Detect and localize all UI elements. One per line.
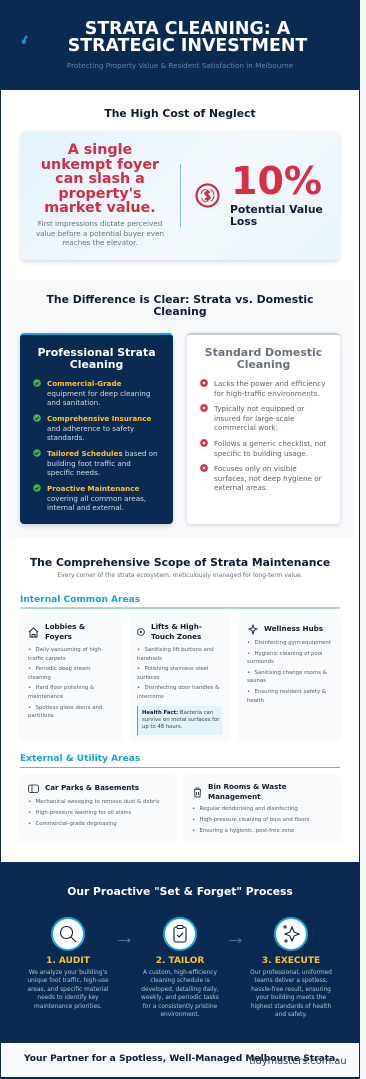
icon: sparkles [274,917,308,951]
step text: We analyze your building's [29,970,107,976]
icon: dollar circle [195,183,220,208]
step 3 execute [250,917,332,1018]
card title [205,346,322,371]
check item 3: Tailored Schedules based on [47,449,158,458]
icon: lift button [137,628,145,636]
arrow [229,938,242,943]
check item 3: specific needs. [47,468,100,477]
stat: 10%: 10% [231,159,322,203]
panel: comparison background [7,280,353,537]
card heading: Car Parks & Basements [45,783,139,792]
task list: • [137,685,140,691]
card title: Professional Strata [37,346,156,359]
divider [180,164,181,227]
card title: Cleaning [70,358,123,371]
step title: 1. AUDIT [46,956,90,966]
card title: Standard Domestic [205,346,322,359]
cross item 4 [200,464,322,492]
task list: • [28,685,31,691]
check item 4: covering all common areas, [47,494,146,503]
task list: health [247,698,264,704]
section rule [20,607,340,608]
heading: process: Our Proactive "Set & Forget" Process [67,884,293,898]
card title: Cleaning [237,358,290,371]
step text: developed, detailing daily, [141,987,219,993]
icon: bin [194,788,201,798]
heading: difference: The Difference is Clear: Strata vs. Domestic [46,293,314,306]
check item 4 [33,484,146,512]
step 2 tailor [141,917,219,1018]
task list: • [137,647,140,653]
check item 2: standards. [47,433,85,442]
icon: sparkle [248,624,258,635]
supporting text: First impressions dictate perceived [38,219,162,228]
task list: Mechanical sweeping to remove dust & debris High-pressure washing for oil stains Commercial-grade degreasing [36,799,160,827]
cross item 1: for high-traffic environments. [214,389,320,398]
task list: • [247,670,250,676]
icon: clipboard [163,917,197,951]
task list: Disinfecting gym equipment Hygienic cleaning of pool [254,640,331,657]
icon: house [28,627,38,638]
watermark: tidymasters.com.au [249,1056,347,1067]
cross item 2: commercial work. [214,423,278,432]
card heading: Lobbies & [45,622,85,631]
task list: • [28,810,31,816]
check item 4: Proactive Maintenance [47,484,139,493]
step text: environment. [160,1012,200,1018]
health fact callout: survive on metal surfaces for [142,717,219,723]
task list: maintenance Spotless glass doors and [28,694,102,711]
section rule [20,767,340,768]
stat label [230,203,323,228]
scope subtitle: Every corner of the strata ecosystem, meticulously managed for long-term value. [57,572,303,579]
task list: • [28,799,31,805]
card: bin rooms and waste management [184,775,340,842]
check item 2: Comprehensive Insurance [47,414,151,423]
cross item 3: Follows a generic checklist, not [214,439,326,448]
card: lifts and high-touch zones [130,615,230,742]
icon: car park [28,784,39,793]
heading: scope: The Comprehensive Scope of Strata Maintenance [30,556,330,568]
step 1 audit [27,917,109,1010]
health fact callout [137,706,222,735]
panel: cost of neglect [21,131,339,260]
supporting text [36,219,164,247]
cross item 4: Focuses only on visible [214,464,297,473]
step text: maintenance priorities. [34,1004,102,1010]
health fact callout: up to 48 hours. [142,724,182,730]
heading: internal common areas: Internal Common Areas [20,594,140,604]
task list: • [28,666,31,672]
card heading: Wellness Hubs [264,624,323,633]
card heading: Foyers [45,632,72,641]
heading: high cost of neglect: The High Cost of Neglect [104,107,256,120]
check item 3: building foot traffic and [47,459,131,468]
task list: • [192,817,195,823]
check item 3 [33,449,158,477]
subtitle: Protecting Property Value & Resident Satisfaction in Melbourne [67,60,293,70]
step text: for a consistently pristine [143,1004,217,1010]
callout text: market value. [44,200,156,216]
task list: cleaning Hard floor polishing & [28,675,94,691]
supporting text: value before a potential buyer even [36,229,164,238]
panel: content background [1,90,359,862]
task list: • [192,806,195,812]
task list: intercoms [137,694,164,700]
card heading: Management [208,792,261,801]
task list: • [247,640,250,646]
cross item 2: insured for large-scale [214,414,294,423]
cross item 1 [200,379,326,398]
cross item 1: Lacks the power and efficiency [214,379,325,388]
task list: surfaces Disinfecting door handles & [137,675,219,691]
task list [137,647,219,700]
cross item 2 [200,404,304,432]
step text: needs to identify key [37,995,99,1001]
cross item 3 [200,439,326,458]
footer message: Your Partner for a Spotless, Well-Managed Melbourne Strata. [24,1054,339,1064]
card heading: Lifts & High- [151,622,202,631]
check item 2 [33,414,151,442]
heading: difference [46,293,314,318]
panel: professional strata cleaning [20,333,173,524]
task list [247,640,331,704]
step text: Our professional, uniformed [250,970,332,976]
panel: standard domestic cleaning [187,333,340,524]
task list: • [192,828,195,834]
step text: cleaning schedule is [150,978,210,984]
title: STRATA CLEANING: A [85,18,290,38]
step text: areas, and specific material [28,987,108,993]
step text [27,969,109,1010]
task list: • [28,647,31,653]
callout text: unkempt foyer [41,156,159,172]
task list: surrounds Sanitising change rooms & [247,659,327,676]
step text: weekly, and periodic tasks [141,995,219,1001]
check item 4: internal and external. [47,503,124,512]
step text: A custom, high-efficiency [143,970,217,976]
icon: water drop [22,35,28,44]
card heading [208,782,287,801]
arrow [118,938,130,943]
task list: • [247,651,250,657]
callout text: A single [68,142,132,158]
task list: • [137,666,140,672]
check item 1: Commercial-Grade [47,379,121,388]
task list: Regular deodorising and disinfecting High-pressure cleaning of bins and floors Ensuring a hygienic, pest-free zone [200,806,309,834]
card heading [45,622,85,641]
heading: difference: Cleaning [153,305,207,318]
stat label: Potential Value [230,203,323,216]
title [68,18,308,56]
cross item 4: external areas. [214,483,268,492]
cross item 4: surfaces, not deep hygiene or [214,474,322,483]
callout text [41,142,159,216]
task list: • [28,821,31,827]
step text: unique foot traffic, high-use [27,978,109,984]
card heading: Bin Rooms & Waste [208,782,287,791]
check item 2: and adherence to safety [47,424,134,433]
step text: hassle-free result, ensuring [251,987,331,993]
task list: saunas Ensuring resident safety & [247,678,326,695]
task list: partitions [28,713,54,719]
check item 1: equipment for deep cleaning [47,389,150,398]
step text [250,969,332,1019]
task list: Sanitising lift buttons and [144,647,214,653]
card: wellness hubs [239,615,340,742]
card: lobbies and foyers [20,615,121,742]
check item 1: and sanitation. [47,398,100,407]
supporting text: reaches the elevator. [62,238,138,247]
step text: teams deliver a spotless, [254,978,328,984]
callout text: can slash a [55,171,145,187]
health fact callout: Health Fact: Bacteria can [142,710,213,716]
cross item 3: specific to building usage. [214,449,308,458]
icon: magnifier [51,917,85,951]
check item 1 [33,379,150,407]
heading: external and utility areas: External & Utility Areas [20,754,140,764]
cross item 2: Typically not equipped or [214,404,304,413]
card title [37,346,156,371]
header band [0,0,360,90]
panel: footer [1,1043,359,1077]
step title: 2. TAILOR [156,956,204,966]
task list: • [28,705,31,711]
title: STRATEGIC INVESTMENT [68,36,307,56]
task list: Daily vacuuming of high- [36,647,103,653]
task list: traffic carpets Periodic deep steam [28,656,90,672]
step text: and safety. [275,1012,307,1018]
task list: handrails Polishing stainless steel [137,656,208,672]
callout text: property's [58,186,142,202]
card heading: Touch Zones [151,632,201,641]
step text: highest standards of health [251,1004,331,1010]
card: car parks and basements [20,775,176,842]
step text [141,969,219,1018]
task list: • [247,689,250,695]
card heading [151,622,202,641]
task list [28,647,103,719]
step title: 3. EXECUTE [262,956,320,966]
stat label: Loss [230,215,257,228]
panel: process band [0,862,360,1042]
step text: your building meets the [256,995,326,1001]
